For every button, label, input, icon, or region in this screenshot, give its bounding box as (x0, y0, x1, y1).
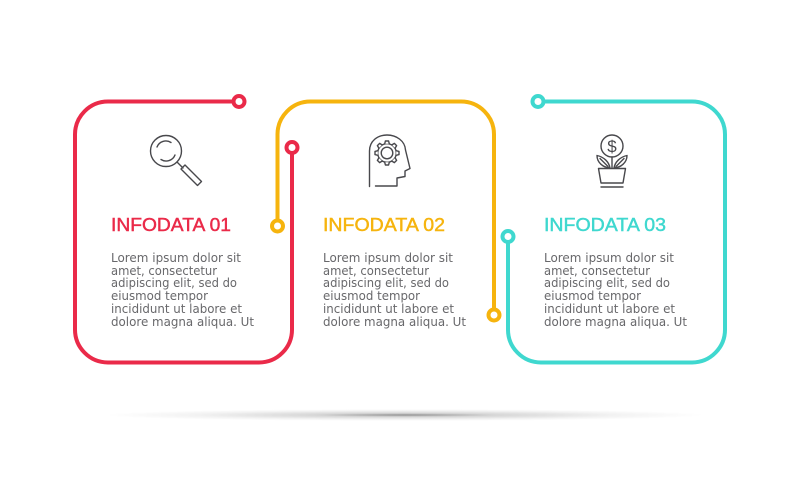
text block: infodata 02: amet, consectetur (323, 264, 429, 278)
panel: infodata 03 (502, 96, 725, 362)
text block: infodata 01: Lorem ipsum dolor sit (111, 251, 241, 265)
text block: infodata 03: Lorem ipsum dolor sit (544, 251, 674, 265)
text block: infodata 03: eiusmod tempor (544, 289, 641, 303)
heading: infodata 01: INFODATA 01 (111, 214, 231, 235)
icon: money plant (597, 135, 627, 187)
text block: infodata 03: dolore magna aliqua. Ut (544, 315, 687, 329)
text block: infodata 02: adipiscing elit, sed do (323, 276, 449, 290)
icon: magnifying glass (150, 136, 202, 186)
ground shadow (105, 409, 705, 421)
heading: infodata 02: INFODATA 02 (323, 214, 445, 235)
yellow connector outline (277, 102, 494, 315)
text block: infodata 01: amet, consectetur (111, 264, 217, 278)
panel: infodata 02 (272, 102, 500, 329)
red connector outline (75, 102, 292, 362)
text block: infodata 01: eiusmod tempor (111, 289, 208, 303)
teal connector outline (508, 102, 725, 362)
text block: infodata 03: adipiscing elit, sed do (544, 276, 670, 290)
text block: infodata 02: eiusmod tempor (323, 289, 420, 303)
text block: infodata 03: incididunt ut labore et (544, 302, 675, 316)
text block: infodata 03: amet, consectetur (544, 264, 650, 278)
panel: infodata 01 (75, 96, 297, 362)
red end node (286, 142, 298, 153)
yellow start node (272, 220, 283, 232)
icon: head with gear (370, 135, 410, 186)
yellow end node (488, 310, 500, 320)
dollar sign: $ (607, 137, 617, 156)
red start node (234, 96, 244, 107)
text block: infodata 02: incididunt ut labore et (323, 302, 454, 316)
text block: infodata 02: Lorem ipsum dolor sit (323, 251, 453, 265)
teal end node (502, 231, 514, 242)
heading: infodata 03: INFODATA 03 (544, 214, 666, 235)
text block: infodata 01: incididunt ut labore et (111, 302, 242, 316)
teal start node (532, 96, 544, 107)
text block: infodata 01: dolore magna aliqua. Ut (111, 315, 254, 329)
text block: infodata 02: dolore magna aliqua. Ut (323, 315, 466, 329)
text block: infodata 01: adipiscing elit, sed do (111, 276, 237, 290)
